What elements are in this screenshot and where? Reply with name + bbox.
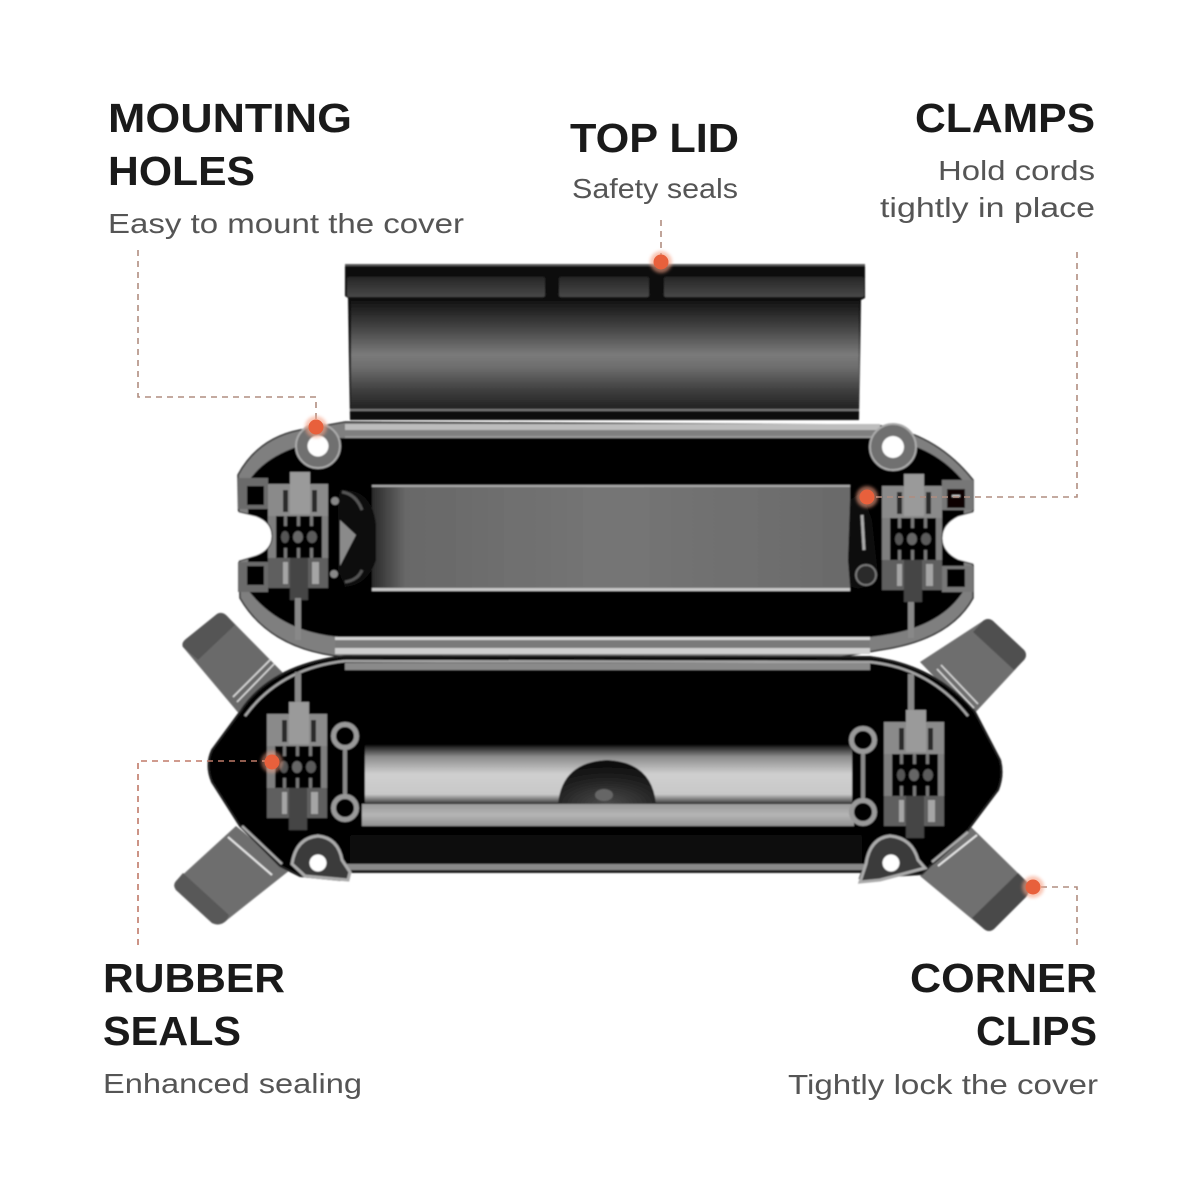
cord notch: right — [942, 511, 978, 565]
text block: mounting holes — [108, 95, 464, 239]
small frame squares — [238, 478, 973, 592]
text block: corner clips: CORNER — [910, 955, 1097, 1001]
upper tray — [234, 422, 978, 657]
text block: clamps: CLAMPS — [915, 95, 1095, 141]
text block: rubber seals: RUBBER — [103, 955, 285, 1001]
top lid — [345, 264, 865, 420]
clamp: lower left — [267, 702, 327, 830]
text block: top lid: Safety seals — [572, 173, 738, 204]
clamp: upper right — [882, 474, 942, 602]
text block: mounting holes: Easy to mount the cover — [108, 208, 464, 239]
text block: clamps: Hold cords — [938, 155, 1095, 186]
corner clip: bottom right — [920, 824, 1030, 931]
text block: top lid: TOP LID — [570, 115, 739, 161]
text block: rubber seals: Enhanced sealing — [103, 1068, 362, 1099]
corner clip: top right — [920, 619, 1026, 716]
marker: clamps — [856, 486, 878, 508]
callout line: corner clips — [1036, 887, 1077, 945]
text block: corner clips: CLIPS — [976, 1008, 1097, 1054]
mounting hole: left — [296, 424, 340, 468]
mounting ear: lower left — [292, 836, 350, 880]
post rings: right — [852, 728, 874, 824]
text block: mounting holes: HOLES — [108, 148, 255, 194]
lower tray — [208, 656, 1002, 882]
marker: mounting holes — [305, 416, 327, 438]
corner clip: bottom left — [174, 826, 290, 924]
latch bracket: left — [330, 490, 376, 587]
text block: clamps — [880, 95, 1095, 223]
text block: top lid — [570, 115, 739, 204]
marker: top lid — [650, 251, 672, 273]
marker: corner clips — [1022, 876, 1044, 898]
text block: clamps: tightly in place — [880, 192, 1095, 223]
text block: rubber seals — [103, 955, 362, 1099]
centre dome — [558, 760, 656, 804]
text block: rubber seals: SEALS — [103, 1008, 241, 1054]
cord notch: left — [234, 511, 272, 562]
mounting ear: lower right — [860, 836, 925, 882]
post rings: left — [334, 724, 356, 820]
text block: corner clips — [788, 955, 1098, 1100]
latch bracket: right — [848, 492, 878, 588]
mounting hole: right — [870, 424, 916, 470]
product photo: open cord cover — [174, 264, 1030, 931]
callout line: rubber seals — [138, 761, 272, 945]
text block: mounting holes: MOUNTING — [108, 95, 352, 141]
callout line: mounting holes — [138, 250, 316, 420]
corner clip: top left — [182, 613, 288, 722]
clamp: upper left — [268, 472, 328, 600]
clamp: lower right — [884, 710, 944, 838]
callout line: top lid — [660, 220, 662, 256]
text block: corner clips: Tightly lock the cover — [788, 1069, 1098, 1100]
marker: rubber seals — [261, 751, 283, 773]
callout line: clamps — [875, 252, 1077, 497]
